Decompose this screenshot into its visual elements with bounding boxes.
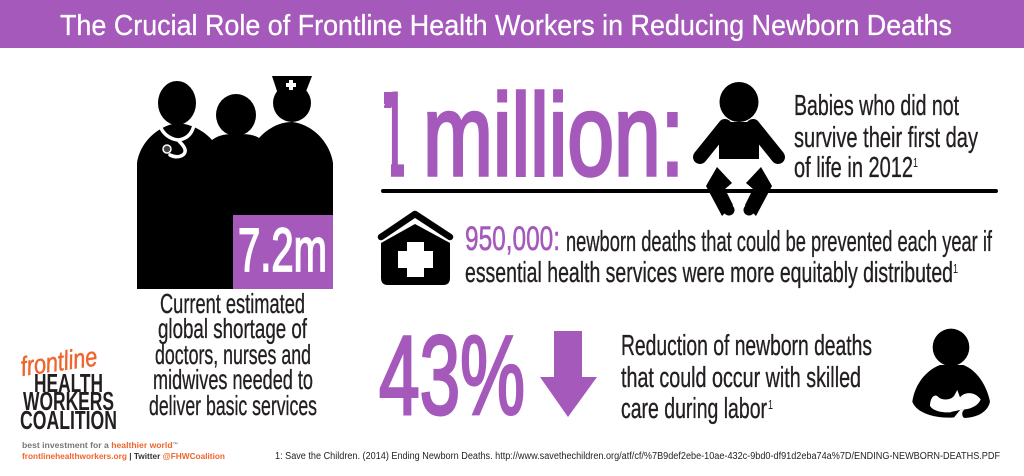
text: shortage description: global shortage of bbox=[158, 313, 307, 344]
text: reduction of newborn deaths: care during labor bbox=[621, 393, 767, 425]
heading: 1 million: million: bbox=[423, 70, 684, 200]
text: babies who did not survive: of life in 2012 bbox=[794, 152, 913, 184]
text: 950,000: 1 bbox=[953, 261, 958, 276]
text: reduction of newborn deaths: Reduction of newborn deaths bbox=[621, 330, 872, 362]
heading: 1 million: 1 bbox=[380, 68, 408, 201]
logo: Frontline Health Workers Coalition: COALITION bbox=[20, 405, 117, 435]
text: reduction of newborn deaths: that could occur with skilled bbox=[621, 362, 861, 394]
text: shortage description: deliver basic services bbox=[149, 390, 317, 421]
logo: Frontline Health Workers Coalition: frontline bbox=[19, 342, 99, 382]
text: 950,000: 950,000: bbox=[465, 220, 560, 258]
text: reduction of newborn deaths bbox=[621, 330, 872, 425]
logo tagline bbox=[22, 441, 225, 461]
text: babies who did not survive bbox=[794, 90, 978, 184]
stat: 43%: 43% bbox=[379, 313, 525, 438]
text: shortage description: doctors, nurses and bbox=[155, 339, 311, 370]
icon: stethoscope bbox=[159, 123, 194, 157]
text: shortage description: Current estimated bbox=[160, 288, 305, 319]
text: reduction of newborn deaths: 1 bbox=[768, 397, 773, 412]
icon: baby bbox=[700, 82, 778, 216]
text: 950,000 bbox=[465, 220, 993, 289]
logo tagline: best investment for a healthier world bbox=[22, 441, 168, 450]
stat box: 7.2m bbox=[233, 215, 333, 289]
title banner bbox=[0, 0, 1024, 48]
logo: Frontline Health Workers Coalition: WORKERS bbox=[23, 386, 114, 416]
icon: mother and baby bbox=[912, 329, 990, 418]
divider bbox=[381, 189, 998, 193]
heading: 1 million bbox=[384, 89, 678, 178]
title banner: The Crucial Role of Frontline Health Workers in Reducing Newborn Deaths bbox=[60, 10, 952, 42]
arrow: down bbox=[540, 331, 597, 417]
logo tagline: ™ bbox=[173, 442, 178, 448]
stat box: 7.2m: 7.2m bbox=[238, 216, 327, 284]
icon: health workers group bbox=[137, 76, 333, 289]
text: shortage description bbox=[149, 288, 317, 421]
logo tagline: frontlinehealthworkers.org | Twitter @FHWCoalition bbox=[22, 452, 225, 461]
icon: health facility house bbox=[381, 214, 450, 285]
text: babies who did not survive: 1 bbox=[913, 155, 918, 170]
text: shortage description: midwives needed to bbox=[153, 364, 313, 395]
logo: Frontline Health Workers Coalition: HEALTH bbox=[34, 368, 103, 398]
logo: Frontline Health Workers Coalition bbox=[19, 342, 117, 435]
